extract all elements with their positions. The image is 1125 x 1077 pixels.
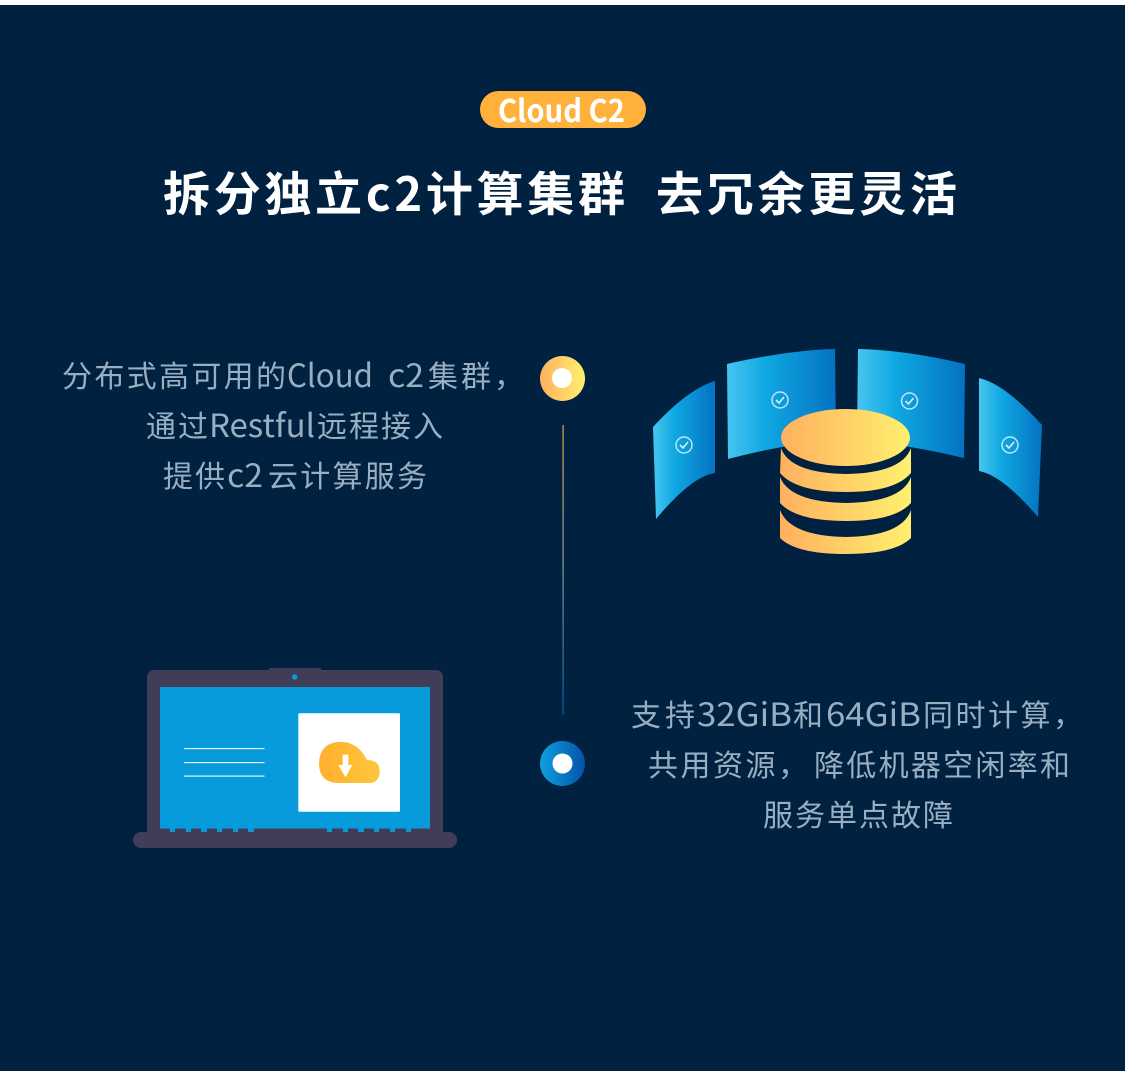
icon: cloud download bbox=[319, 742, 380, 783]
text block: top left description: c2 bbox=[227, 451, 263, 497]
illustration: laptop bbox=[133, 668, 457, 848]
text lines on screen bbox=[184, 748, 264, 777]
text block: bottom right description: 降低机器空闲率和 bbox=[814, 741, 1070, 785]
illustration: database with cloud panels bbox=[653, 349, 1042, 554]
screen bbox=[160, 687, 430, 832]
text block: top left description: Cloud bbox=[287, 351, 373, 397]
text block: bottom right description: 服务单点故障 bbox=[763, 791, 953, 835]
title: 拆分独立c2计算集群 bbox=[163, 156, 625, 225]
text block: top left description: Restful bbox=[209, 401, 315, 447]
panel: inner right bbox=[857, 349, 965, 458]
text block: top left description bbox=[62, 351, 524, 497]
text block: top left description: 集群， bbox=[428, 352, 524, 396]
database cylinder bbox=[780, 409, 911, 554]
text block: bottom right description: 和 bbox=[793, 691, 823, 735]
text block: bottom right description: 64GiB bbox=[826, 690, 921, 736]
panel: inner left bbox=[727, 349, 836, 459]
connector line bbox=[562, 425, 564, 715]
node: top orange dot bbox=[540, 356, 585, 401]
white download card bbox=[298, 713, 400, 812]
text block: bottom right description bbox=[631, 690, 1083, 835]
text block: bottom right description: 32GiB bbox=[697, 690, 792, 736]
text block: top left description: c2 bbox=[388, 351, 424, 397]
laptop lid bbox=[147, 668, 443, 835]
title: 去冗余更灵活 bbox=[656, 156, 957, 225]
text block: bottom right description: 共用资源， bbox=[648, 741, 808, 785]
text block: top left description: 远程接入 bbox=[317, 402, 443, 446]
text block: top left description: 云计算服务 bbox=[268, 452, 427, 496]
text block: bottom right description: 支持 bbox=[631, 691, 695, 735]
timeline connector bbox=[540, 356, 585, 786]
text block: top left description: 分布式高可用的 bbox=[62, 352, 286, 396]
text block: bottom right description: 同时计算， bbox=[923, 691, 1083, 735]
badge: Cloud C2: Cloud C2 bbox=[498, 86, 625, 131]
text block: top left description: 通过 bbox=[146, 402, 208, 446]
text block: top left description: 提供 bbox=[163, 452, 225, 496]
title bbox=[163, 156, 957, 225]
laptop base bbox=[133, 832, 457, 848]
panel: far right bbox=[979, 378, 1042, 517]
webcam dot bbox=[292, 674, 297, 680]
node: bottom blue dot bbox=[540, 741, 585, 786]
panel: far left bbox=[653, 381, 715, 519]
